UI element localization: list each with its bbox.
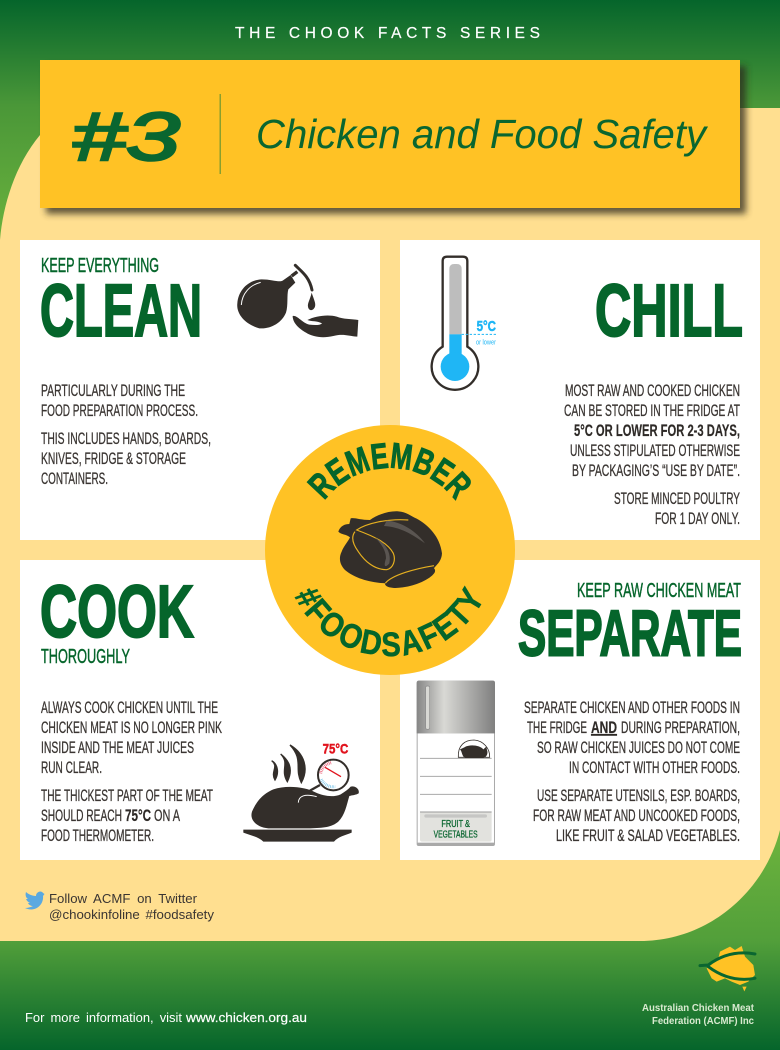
clean body text [41, 382, 211, 488]
clean body text: FOOD PREPARATION PROCESS. [41, 402, 198, 420]
separate body text: THE FRIDGE [527, 719, 587, 737]
separate body text [524, 699, 740, 845]
icon: roast chicken with thermometer: 75°C [323, 740, 348, 756]
acmf logo [642, 946, 755, 1027]
clean heading: CLEAN [40, 269, 202, 352]
cook body text: 75°C [125, 807, 151, 825]
icon: thermometer [432, 257, 497, 390]
icon: twitter bird [25, 892, 44, 909]
icon: fridge: VEGETABLES [434, 830, 478, 841]
separate body text: AND [591, 719, 617, 737]
cook body text: SHOULD REACH [41, 807, 122, 825]
acmf logo: Australian Chicken Meat [642, 1002, 754, 1014]
title: Chicken and Food Safety [256, 111, 708, 157]
panel: chill [400, 240, 760, 540]
cook heading: COOK [40, 570, 194, 653]
twitter follow block: Follow ACMF on Twitter [49, 891, 198, 906]
cook body text: INSIDE AND THE MEAT JUICES [41, 739, 194, 757]
icon: fridge [417, 681, 495, 846]
cook body text: ALWAYS COOK CHICKEN UNTIL THE [41, 699, 218, 717]
footer link [25, 1010, 307, 1025]
footer link: www.chicken.org.au [185, 1010, 307, 1025]
icon: roast chicken with thermometer [243, 740, 359, 842]
issue number: #3 [72, 99, 180, 175]
twitter follow block [25, 891, 214, 922]
badge text: remember: REMEMBER [306, 442, 471, 501]
acmf logo: Federation (ACMF) Inc [652, 1015, 754, 1027]
icon: thermometer: 5°C [477, 319, 496, 335]
icon: bottle and hand [237, 265, 358, 337]
icon: fridge: FRUIT & [441, 819, 470, 830]
cook body text: THE THICKEST PART OF THE MEAT [41, 787, 213, 805]
remember badge [265, 425, 515, 675]
twitter follow block: @chookinfoline #foodsafety [49, 907, 214, 922]
chill body text [564, 382, 740, 528]
icon: thermometer: or lower [476, 339, 497, 346]
cook body text [41, 699, 222, 845]
clean body text: PARTICULARLY DURING THE [41, 382, 185, 400]
cook body text: RUN CLEAR. [41, 759, 102, 777]
clean kicker: KEEP EVERYTHING [41, 254, 159, 277]
cook kicker: THOROUGHLY [41, 645, 130, 668]
panel: cook [20, 560, 380, 860]
icon: roast chicken [338, 511, 442, 592]
clean body text: CONTAINERS. [41, 470, 108, 488]
cook body text: CHICKEN MEAT IS NO LONGER PINK [41, 719, 222, 737]
clean body text: THIS INCLUDES HANDS, BOARDS, [41, 430, 211, 448]
footer link: For more information, visit [25, 1010, 182, 1025]
badge text: foodsafety: #FOODSAFETY [294, 586, 482, 657]
icon: australia wishbone [700, 946, 755, 991]
title banner [40, 60, 746, 214]
cook body text: ON A [154, 807, 180, 825]
cook body text: FOOD THERMOMETER. [41, 827, 154, 845]
panel: separate [400, 560, 760, 860]
clean body text: KNIVES, FRIDGE & STORAGE [41, 450, 186, 468]
panel: clean [20, 240, 380, 540]
series heading: THE CHOOK FACTS SERIES [235, 25, 540, 42]
